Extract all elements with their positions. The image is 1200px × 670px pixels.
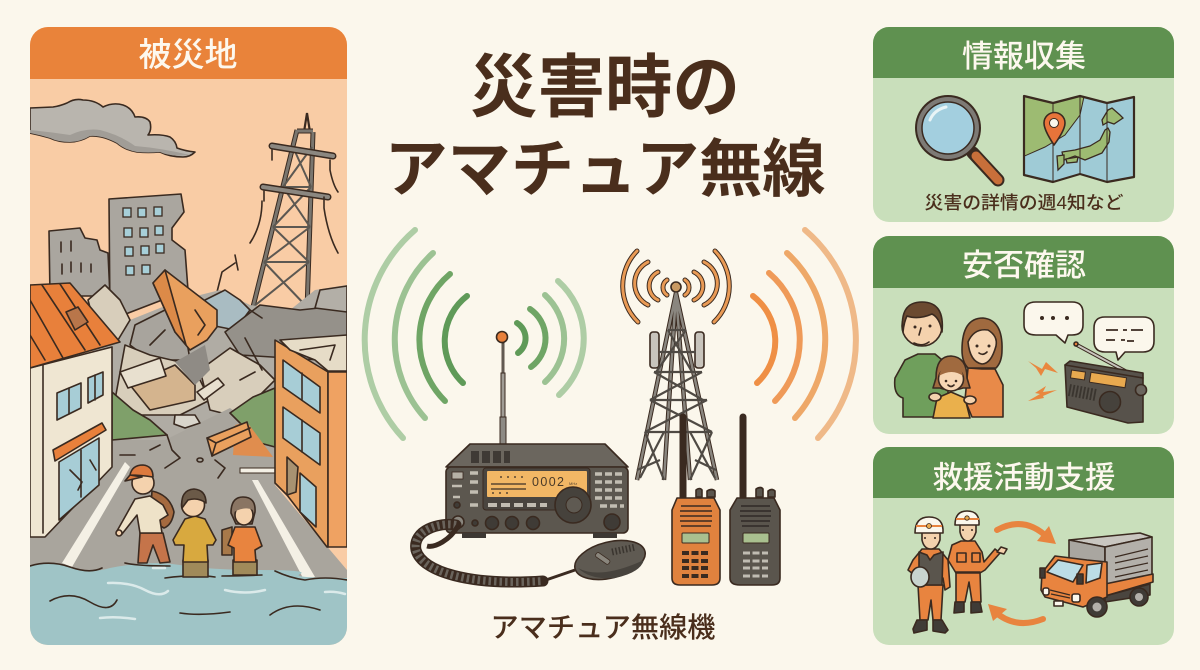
panel: information gathering: [873, 27, 1174, 222]
awning: [53, 423, 106, 461]
heading: rescue support: 救援活動支援: [932, 461, 1116, 495]
radio waves: green left: [365, 230, 467, 438]
microphone: [571, 534, 649, 586]
green trees: [112, 388, 275, 447]
roof: [30, 283, 120, 368]
rescue worker with vest: [908, 517, 950, 633]
cloud of smoke: [30, 99, 195, 157]
label: amateur radio device: アマチュア無線機: [490, 612, 716, 643]
tower signal arcs: [623, 251, 729, 322]
father: [895, 354, 948, 417]
title line 2: アマチュア無線: [384, 135, 826, 205]
icon: map of Japan: [1020, 92, 1134, 182]
icon: magnifying glass: [915, 95, 998, 180]
arrow: truck to worker: [988, 604, 1043, 623]
amateur radio transceiver: MHz: [569, 481, 577, 486]
coiled cord: [416, 524, 575, 582]
survivor in yellow jacket: [173, 489, 216, 577]
mother: [965, 368, 1003, 417]
speech bubble: dots: [1024, 302, 1083, 343]
ruined building far left: [49, 228, 110, 296]
radio waves: green right: [517, 281, 584, 395]
rubble pile: [88, 285, 347, 445]
right orange building: [275, 335, 347, 547]
radio tower: [623, 251, 729, 480]
floodwater: [30, 563, 347, 645]
orange handheld radio: [672, 417, 720, 585]
panel outline header: disaster area: [30, 27, 347, 79]
telescopic antenna: [496, 332, 508, 445]
lightning bolts: [1028, 361, 1058, 401]
portable radio: [1065, 342, 1146, 423]
amateur radio transceiver: [416, 332, 649, 586]
fallen orange concrete block: [207, 422, 273, 457]
display: [483, 468, 590, 510]
black handheld radio: [730, 417, 780, 585]
panel: rescue support: [873, 447, 1174, 645]
windows: [57, 383, 81, 420]
title: [384, 49, 826, 205]
caption: information gathering: 災害の詳情の週4知など: [924, 193, 1124, 213]
panel background sky: [30, 27, 347, 645]
buttons: [452, 473, 624, 506]
child: [933, 392, 970, 418]
heading: safety confirmation: 安否確認: [962, 248, 1086, 283]
frequency readout: 0002: [532, 475, 565, 489]
family group: [895, 302, 1003, 418]
survivor with red cap: [116, 465, 174, 563]
panel: safety confirmation: [873, 236, 1174, 434]
radio waves: orange right: [753, 230, 856, 438]
title line 1: 災害時の: [470, 49, 740, 126]
ruined office building: [109, 194, 188, 320]
hands: [929, 393, 941, 401]
left house: [30, 283, 120, 537]
speech bubble: morse: [1094, 317, 1154, 360]
header text: disaster area: 被災地: [138, 36, 238, 73]
rescue worker pointing: [948, 511, 1007, 613]
road: [30, 408, 347, 578]
survivor in orange sweater: [222, 497, 262, 575]
knobs: [452, 487, 620, 530]
heading: information gathering: 情報収集: [962, 39, 1086, 74]
display scale: [491, 484, 526, 489]
panel: disaster area: [30, 27, 347, 645]
large fallen orange slab: [153, 270, 217, 350]
truck: [1040, 533, 1153, 617]
broken electric pylon: [216, 113, 338, 310]
shop door: [59, 438, 99, 520]
arrow: worker to truck: [997, 524, 1056, 544]
